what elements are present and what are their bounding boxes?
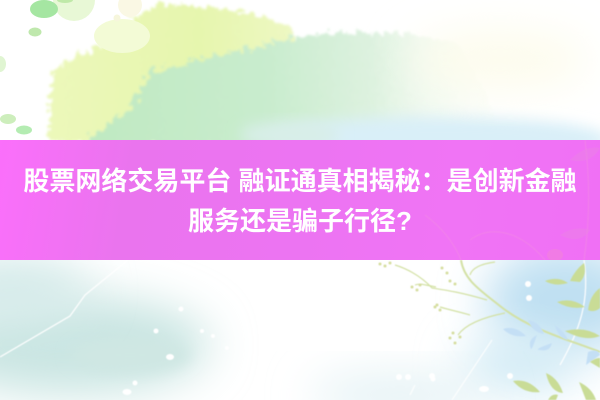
bottom wash	[0, 245, 600, 400]
pale sky wash	[240, 30, 600, 164]
title: 股票网络交易平台 融证通真相揭秘：是创新金融	[23, 166, 577, 196]
branch with flower sprays	[378, 260, 600, 352]
green leaves	[513, 263, 600, 400]
green watercolor splash	[82, 32, 500, 145]
lime watercolor splash	[48, 4, 300, 145]
bubbles top left	[0, 0, 150, 134]
faint illustration showing through the band	[426, 140, 600, 260]
blue leaves	[503, 320, 600, 365]
title	[23, 166, 577, 236]
title: 服务还是骗子行径?	[188, 206, 412, 236]
pink title band	[0, 140, 600, 260]
sparkle lines and dots	[0, 260, 586, 400]
